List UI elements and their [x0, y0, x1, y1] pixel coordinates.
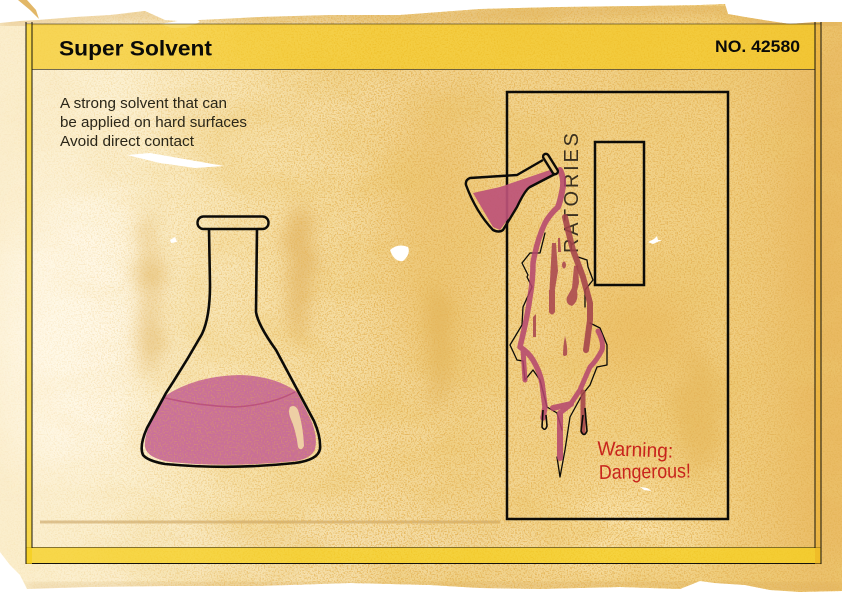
- description text: A strong solvent that can: [60, 95, 227, 112]
- description text: [60, 95, 247, 150]
- flask lip: [542, 153, 559, 175]
- liquid: [145, 375, 316, 465]
- liquid: [473, 170, 557, 230]
- title: Super Solvent: [59, 36, 212, 60]
- description text: Avoid direct contact: [60, 133, 195, 150]
- description text: be applied on hard surfaces: [60, 114, 247, 131]
- liquid surface line: [165, 392, 295, 407]
- door window: [595, 142, 644, 285]
- footer band: [26, 547, 821, 564]
- flask lip: [198, 216, 268, 229]
- flask outline: [142, 229, 320, 467]
- icon: large flask with pink liquid: [140, 216, 320, 470]
- darkened torn edges: [0, 7, 842, 25]
- liquid speckle: [145, 375, 316, 465]
- tears and holes in the paper: [18, 0, 662, 491]
- header band: [26, 24, 821, 70]
- highlight: [289, 406, 304, 449]
- product number: NO. 42580: [715, 38, 800, 56]
- melted hole in door: [510, 170, 607, 477]
- door outline: [507, 92, 728, 519]
- door sign text, vertical and partly dissolved: RATORIES: [561, 133, 583, 253]
- drip tip outlines: [542, 408, 587, 434]
- flask outline: [466, 160, 557, 232]
- warning text: [597, 438, 691, 484]
- warning text: Warning:: [597, 438, 674, 463]
- hole outline: [510, 233, 607, 477]
- acid drips: [520, 170, 602, 458]
- icon: small tilted flask pouring: [466, 153, 559, 232]
- warning text: Dangerous!: [599, 460, 691, 484]
